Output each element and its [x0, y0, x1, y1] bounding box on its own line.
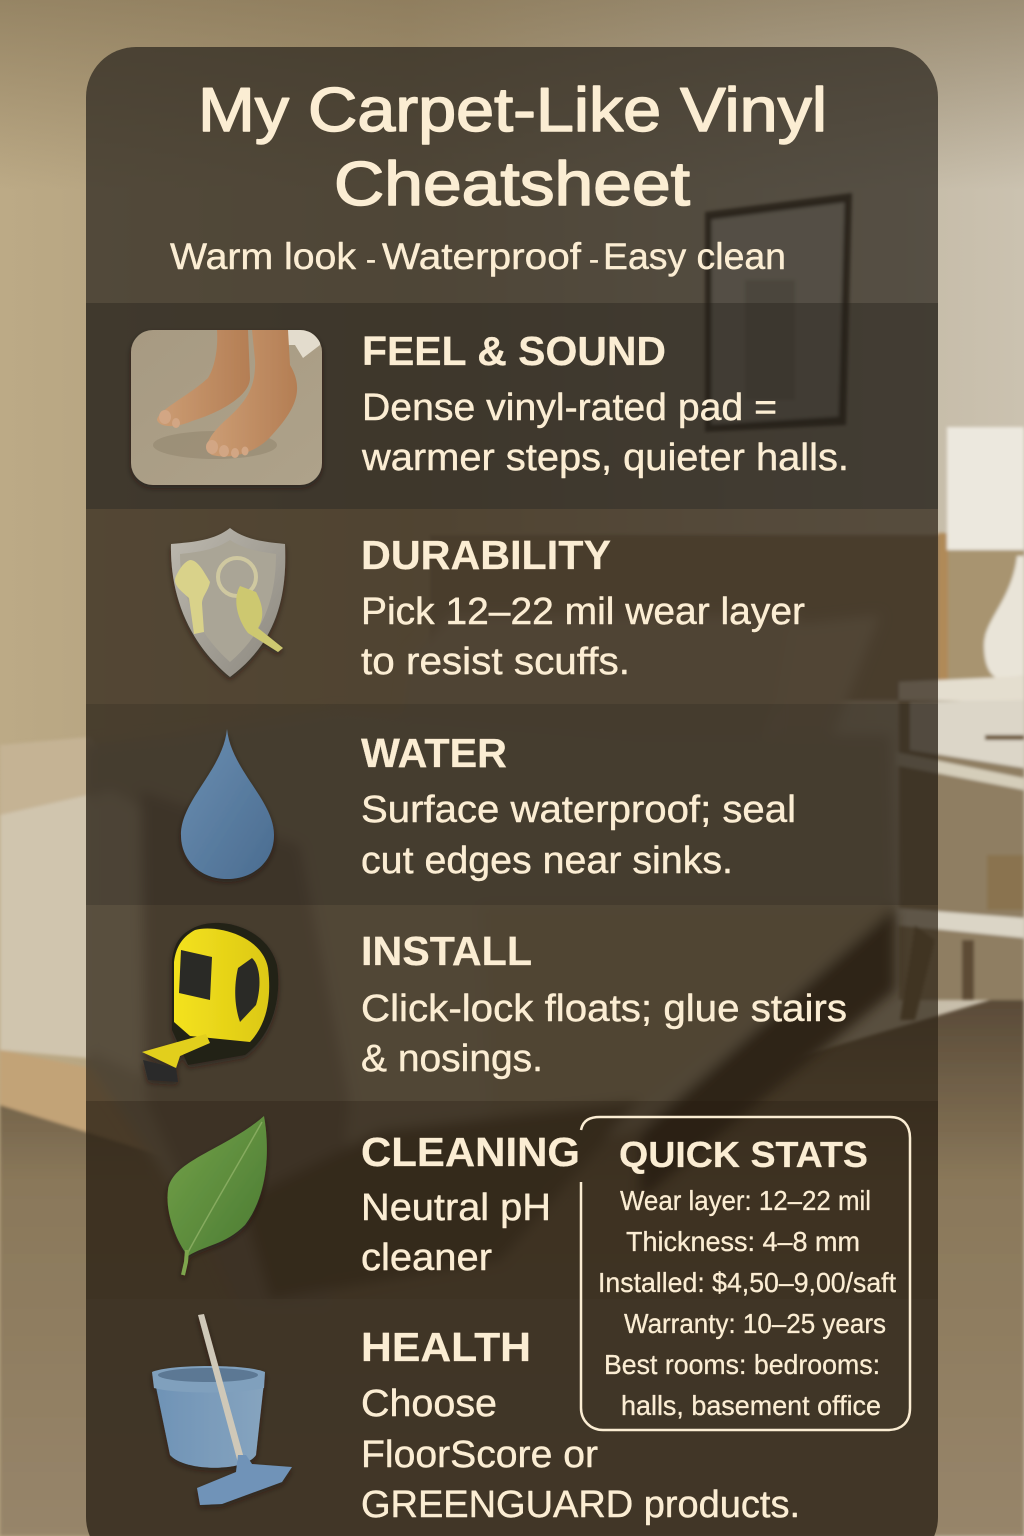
- floor carpet: [0, 990, 1024, 1536]
- body text: warmer steps, quieter halls.: [361, 437, 849, 479]
- body text: to resist scuffs.: [361, 641, 630, 683]
- body text: [361, 387, 849, 479]
- icon: bucket and mop: [152, 1314, 292, 1505]
- cream blanket and wood frame on left: [0, 737, 240, 1180]
- icon: water drop: [181, 729, 274, 879]
- row: health: [152, 1314, 800, 1526]
- panel band: health: [86, 1299, 938, 1536]
- row: durability: [171, 528, 805, 683]
- stat lines: Installed: $4,50–9,00/saft: [598, 1267, 896, 1298]
- framed picture on wall: [705, 193, 852, 432]
- lamp: [947, 427, 1024, 680]
- bed seen through the panel: [86, 615, 895, 1310]
- panel band: cleaning: [86, 1101, 938, 1299]
- subtitle: Warm look: [170, 236, 357, 277]
- nightstand: [895, 676, 1024, 1020]
- body text: [361, 789, 796, 882]
- row: water: [181, 729, 796, 882]
- stat lines: Warranty: 10–25 years: [624, 1308, 886, 1339]
- row: cleaning: [167, 1116, 580, 1279]
- body text: [361, 1187, 551, 1279]
- panel band: durability: [86, 509, 938, 704]
- title: Cheatsheet: [334, 150, 690, 219]
- panel band: feel and sound: [86, 303, 938, 509]
- icon: tape measure: [142, 923, 278, 1082]
- title: My Carpet-Like Vinyl: [198, 76, 827, 145]
- body text: FloorScore or: [361, 1434, 598, 1476]
- body text: [361, 1383, 800, 1526]
- subtitle: [170, 236, 786, 277]
- heading: CLEANING: [361, 1129, 580, 1175]
- stat lines: [598, 1185, 896, 1421]
- icon: bare feet on carpet photo: [131, 330, 322, 485]
- heading: DURABILITY: [361, 532, 611, 578]
- row: feel and sound: [131, 328, 849, 485]
- stat lines: Thickness: 4–8 mm: [626, 1226, 860, 1257]
- subtitle: Easy clean: [603, 236, 786, 277]
- body text: Neutral pH: [361, 1187, 551, 1229]
- stat lines: halls, basement office: [621, 1390, 881, 1421]
- icon: green leaf: [167, 1116, 267, 1275]
- subtitle: -: [589, 243, 599, 276]
- heading: FEEL & SOUND: [362, 328, 666, 374]
- body text: cleaner: [361, 1237, 492, 1279]
- panel band: water: [86, 704, 938, 905]
- row: install: [142, 923, 847, 1082]
- headboard and wall right: [430, 535, 947, 700]
- heading: HEALTH: [361, 1324, 531, 1370]
- subtitle: Waterproof: [382, 236, 582, 277]
- icon: shield with keys: [171, 528, 285, 677]
- body text: Pick 12–22 mil wear layer: [361, 591, 805, 633]
- body text: GREENGUARD products.: [361, 1484, 800, 1526]
- panel band: header: [86, 47, 938, 303]
- title: [198, 76, 827, 219]
- body text: [361, 988, 847, 1080]
- panel band: install: [86, 905, 938, 1101]
- stat lines: Wear layer: 12–22 mil: [620, 1185, 871, 1216]
- heading: WATER: [361, 730, 507, 776]
- body text: & nosings.: [361, 1038, 543, 1080]
- body text: Click-lock floats; glue stairs: [361, 988, 847, 1030]
- body text: [361, 591, 805, 683]
- stat lines: Best rooms: bedrooms:: [604, 1349, 880, 1380]
- body text: Surface waterproof; seal: [361, 789, 796, 831]
- callout: quick stats: [581, 1117, 910, 1430]
- subtitle: -: [366, 243, 376, 276]
- body text: cut edges near sinks.: [361, 840, 733, 882]
- heading: QUICK STATS: [619, 1134, 868, 1175]
- body text: Dense vinyl-rated pad =: [362, 387, 777, 429]
- heading: INSTALL: [361, 928, 532, 974]
- body text: Choose: [361, 1383, 497, 1425]
